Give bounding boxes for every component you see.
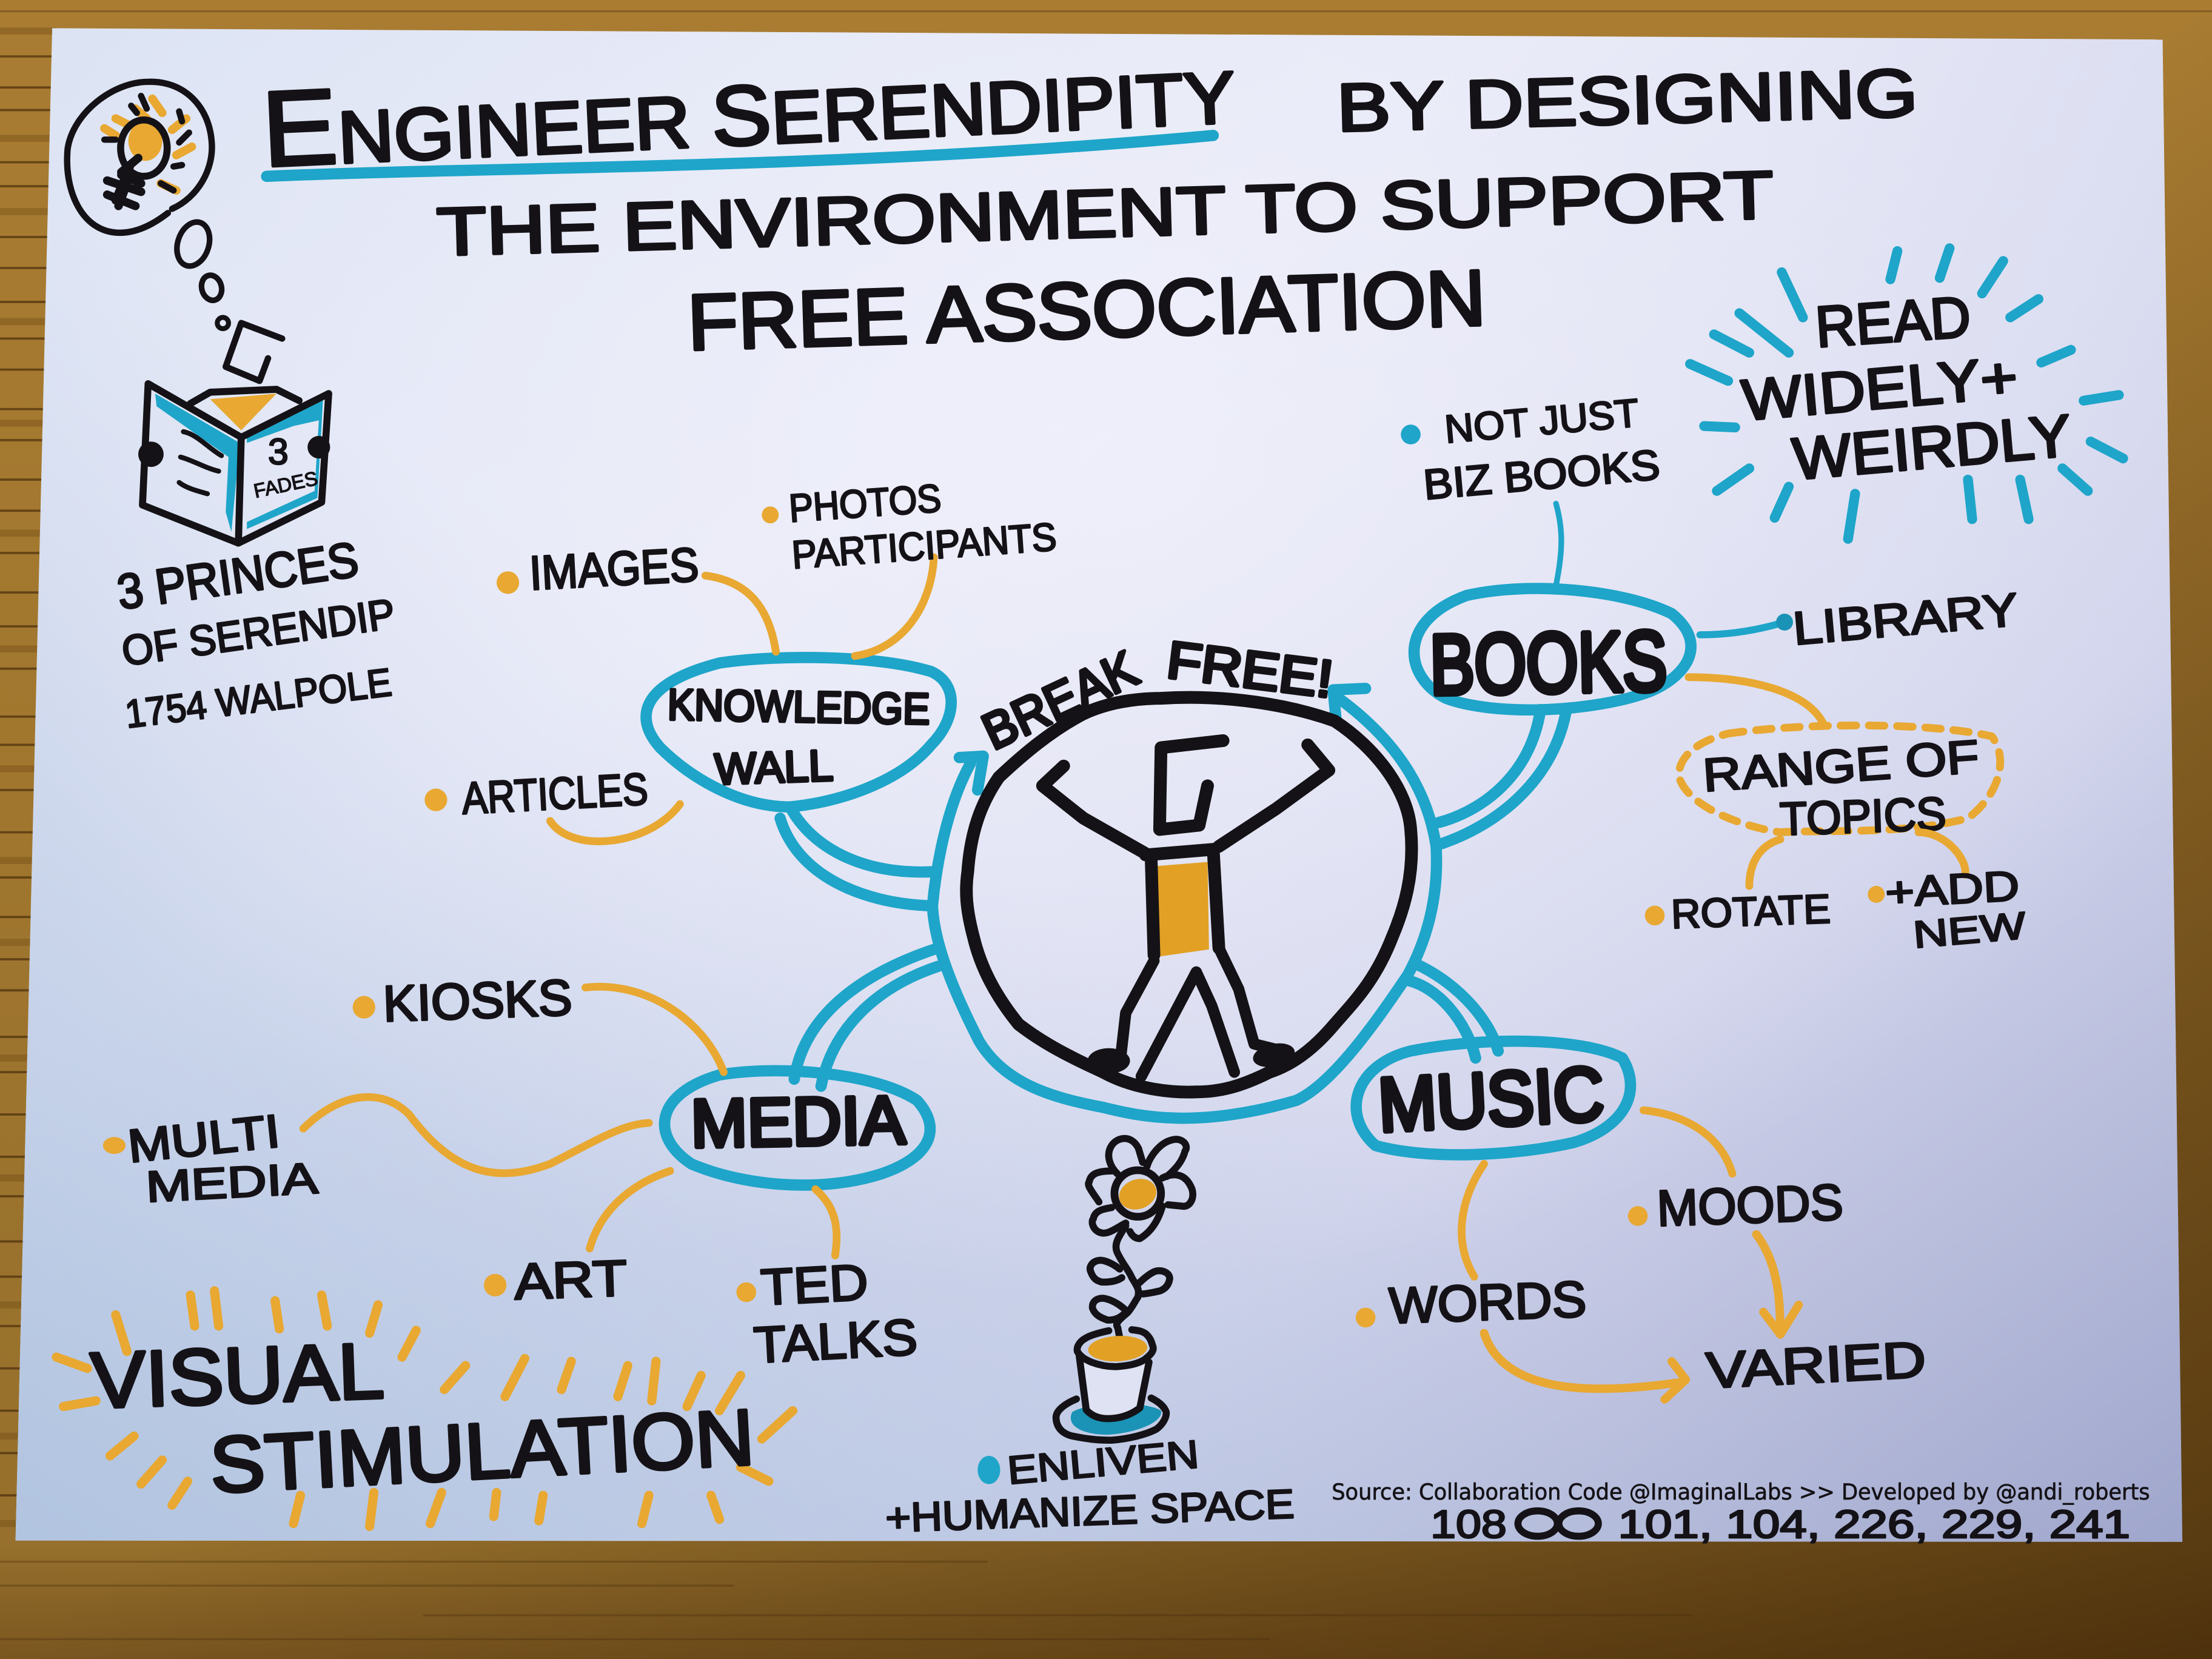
- text: break free: FREE!: [1164, 631, 1336, 709]
- panel: music: MUSIC: [1376, 1051, 1606, 1148]
- books branches: [1401, 390, 2028, 956]
- text: 3 princes of Serendip: OF SERENDIP: [119, 590, 398, 675]
- title underline: [267, 135, 1213, 176]
- callout: read widely and weirdly: WIDELY+: [1739, 345, 2020, 433]
- knowledge wall branches: IMAGES: [528, 537, 700, 600]
- books branches: LIBRARY: [1791, 584, 2020, 655]
- media branches: TED: [759, 1253, 870, 1316]
- music branches: [1356, 1110, 1927, 1399]
- text: break free: [974, 631, 1336, 760]
- callout: read widely and weirdly: [1690, 248, 2123, 539]
- text: enliven and humanize space: +HUMANIZE SPACE: [885, 1481, 1295, 1541]
- icon: open book: [138, 384, 330, 543]
- callout: read widely and weirdly: WEIRDLY: [1790, 402, 2074, 492]
- books branches: TOPICS: [1779, 788, 1947, 845]
- music branches: WORDS: [1388, 1270, 1587, 1334]
- source credit: Source: Collaboration Code @ImaginalLabs >> Developed by @andi_roberts: [1332, 1480, 2150, 1505]
- central circle with figure: [967, 697, 1412, 1092]
- text: enliven and humanize space: ENLIVEN: [1005, 1432, 1201, 1492]
- callout: visual stimulation: STIMULATION: [208, 1393, 756, 1509]
- knowledge wall branches: PHOTOS: [788, 475, 942, 531]
- text: 3 princes of Serendip: 3 PRINCES: [114, 532, 362, 620]
- title: THE ENVIRONMENT TO SUPPORT: [435, 157, 1775, 270]
- panel: books: [1414, 589, 1691, 712]
- media branches: KIOSKS: [382, 969, 573, 1032]
- title: ENGINEER SERENDIPITY: [260, 26, 1237, 189]
- icon: small head: [226, 323, 282, 381]
- panel: knowledge wall: WALL: [714, 742, 834, 794]
- icon: open book: 3: [268, 431, 289, 472]
- panel: media: [665, 1071, 930, 1185]
- books branches: RANGE OF: [1701, 731, 1981, 802]
- panel: books: BOOKS: [1429, 614, 1667, 712]
- icon: flower in pot: [1056, 1139, 1193, 1440]
- icon: light bulb thought: [67, 82, 212, 233]
- panel: knowledge wall: [646, 657, 951, 807]
- media branches: MULTI: [126, 1105, 283, 1173]
- knowledge wall branches: PARTICIPANTS: [790, 514, 1058, 577]
- title: FREE ASSOCIATION: [686, 253, 1487, 367]
- books branches: +ADD: [1884, 862, 2020, 916]
- callout: visual stimulation: VISUAL: [89, 1326, 386, 1425]
- title: [260, 26, 1919, 367]
- books branches: NOT JUST: [1443, 390, 1641, 451]
- music branches: MOODS: [1656, 1173, 1844, 1237]
- media branches: TALKS: [752, 1308, 919, 1373]
- title: BY DESIGNING: [1336, 55, 1919, 146]
- page numbers: 108: [1430, 1502, 1507, 1546]
- page numbers: [1430, 1502, 2130, 1546]
- books branches: NEW: [1911, 904, 2028, 956]
- books branches: BIZ BOOKS: [1421, 441, 1661, 509]
- text: enliven and humanize space: [885, 1432, 1295, 1541]
- knowledge wall branches: ARTICLES: [461, 763, 649, 823]
- music branches: VARIED: [1704, 1330, 1927, 1399]
- panel: media: MEDIA: [690, 1082, 907, 1161]
- panel: knowledge wall: KNOWLEDGE: [667, 681, 930, 734]
- media branches: MEDIA: [145, 1154, 319, 1212]
- books branches: ROTATE: [1671, 886, 1831, 937]
- connectors to hub: [780, 709, 1566, 1086]
- text: 3 princes of Serendip: 1754 WALPOLE: [122, 660, 394, 736]
- page numbers: 101, 104, 226, 229, 241: [1618, 1502, 2130, 1546]
- text: break free: BREAK: [974, 640, 1146, 760]
- text: 3 princes of Serendip: [114, 532, 398, 736]
- callout: visual stimulation: [56, 1291, 793, 1526]
- callout: read widely and weirdly: READ: [1814, 285, 1972, 360]
- media branches: [103, 969, 919, 1373]
- central blue outline with arrows: [933, 688, 1436, 1118]
- knowledge wall branches: [424, 475, 1058, 842]
- icon: open book: FADES: [252, 468, 320, 502]
- media branches: ART: [514, 1249, 628, 1310]
- thought bubbles: [172, 218, 229, 329]
- torso: [1155, 862, 1209, 956]
